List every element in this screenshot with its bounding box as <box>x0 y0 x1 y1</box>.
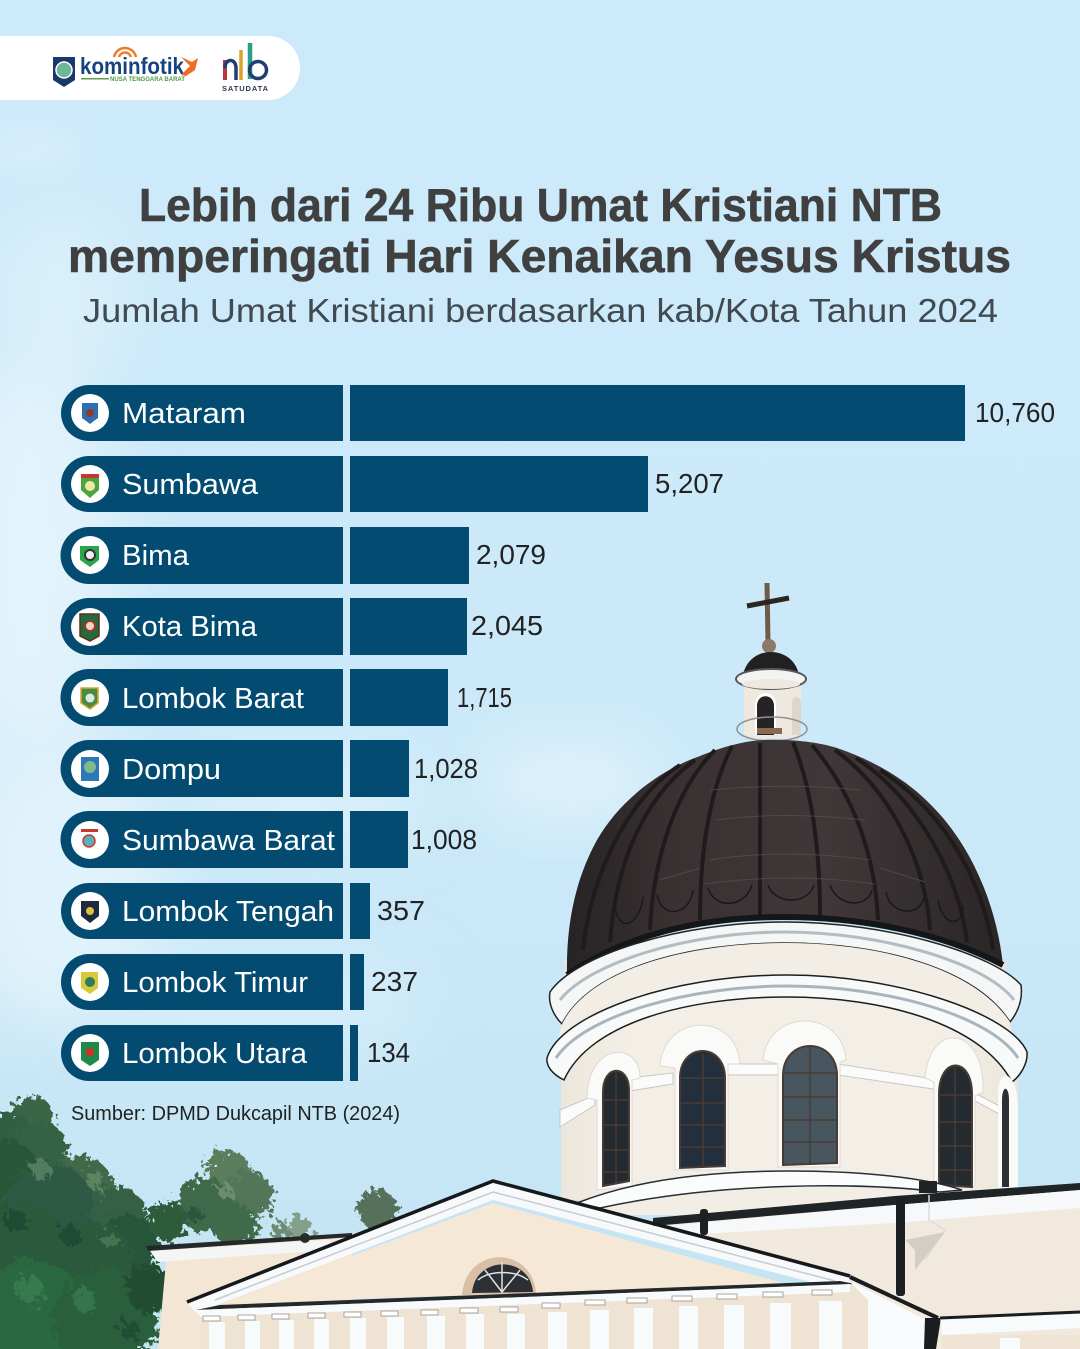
row: Kota Bima: Kota Bima <box>122 611 258 643</box>
row: Dompu <box>61 740 478 797</box>
title: Lebih dari 24 Ribu Umat Kristiani NTB <box>139 179 942 231</box>
row: Sumbawa Barat <box>60 811 477 868</box>
row: Lombok Barat: Lombok Barat <box>122 683 304 715</box>
logo: ntb satudata <box>222 43 269 93</box>
row: Bima <box>60 527 546 584</box>
row: Lombok Tengah <box>61 883 425 939</box>
row: Lombok Timur: Lombok Timur <box>122 967 308 999</box>
row: Mataram <box>61 385 1055 441</box>
row: Kota Bima <box>60 598 543 655</box>
title: memperingati Hari Kenaikan Yesus Kristus <box>68 230 1011 282</box>
row: Dompu: Dompu <box>122 754 221 786</box>
row: Lombok Utara: 134 <box>367 1037 410 1068</box>
row: Lombok Barat: 1,715 <box>457 682 512 713</box>
row: Sumbawa: 5,207 <box>655 468 724 499</box>
string course <box>560 1064 1003 1127</box>
logo: kominfotik <box>53 48 198 87</box>
row: Sumbawa: Sumbawa <box>122 469 259 501</box>
window 1 <box>587 1052 640 1190</box>
window 2 <box>660 1025 740 1170</box>
lower drum <box>561 990 1018 1200</box>
row: Lombok Timur: 237 <box>371 966 418 997</box>
row: Mataram: Mataram <box>122 398 246 430</box>
trees <box>0 1096 398 1349</box>
pediment <box>187 1181 850 1313</box>
window 3 <box>763 1021 846 1167</box>
church <box>130 583 1080 1349</box>
row: Bima: Bima <box>122 540 190 572</box>
source note: Sumber: DPMD Dukcapil NTB (2024) <box>71 1103 400 1125</box>
row: Bima: 2,079 <box>476 539 546 570</box>
logo: kominfotik: kominfotik <box>80 53 184 79</box>
row: Lombok Utara: Lombok Utara <box>122 1038 308 1070</box>
lower cornice <box>547 975 1027 1082</box>
subtitle: Jumlah Umat Kristiani berdasarkan kab/Kota Tahun 2024 <box>83 292 998 329</box>
window 5 <box>998 1076 1018 1190</box>
row: Lombok Timur <box>61 954 418 1010</box>
title <box>68 179 1011 282</box>
entablature <box>130 1277 1080 1349</box>
logo: kominfotik: NUSA TENGGARA BARAT <box>110 76 185 83</box>
row: Sumbawa Barat: Sumbawa Barat <box>122 825 335 857</box>
row: Lombok Tengah: Lombok Tengah <box>122 896 334 928</box>
window 4 <box>925 1038 983 1187</box>
upper drum <box>565 960 1005 1060</box>
row: Lombok Utara <box>61 1025 410 1081</box>
logo strip <box>0 36 300 100</box>
bar chart <box>60 385 1055 1081</box>
drum base ledge <box>577 1171 962 1215</box>
lantern and cross <box>736 583 807 741</box>
right wing <box>653 1181 1080 1349</box>
upper drum band <box>558 943 1012 1040</box>
left wing <box>146 1233 352 1349</box>
row: Lombok Tengah: 357 <box>377 895 425 926</box>
row: Kota Bima: 2,045 <box>471 610 543 641</box>
row: Sumbawa Barat: 1,008 <box>411 824 477 855</box>
dome <box>567 740 1003 975</box>
logo: ntb satudata: SATUDATA <box>222 84 269 93</box>
upper cornice <box>550 922 1021 1024</box>
row: Mataram: 10,760 <box>975 397 1055 428</box>
fan window <box>462 1257 536 1295</box>
row: Lombok Barat <box>60 669 512 726</box>
row: Sumbawa <box>61 456 724 512</box>
row: Dompu: 1,028 <box>414 753 478 784</box>
windows <box>560 1021 1018 1190</box>
